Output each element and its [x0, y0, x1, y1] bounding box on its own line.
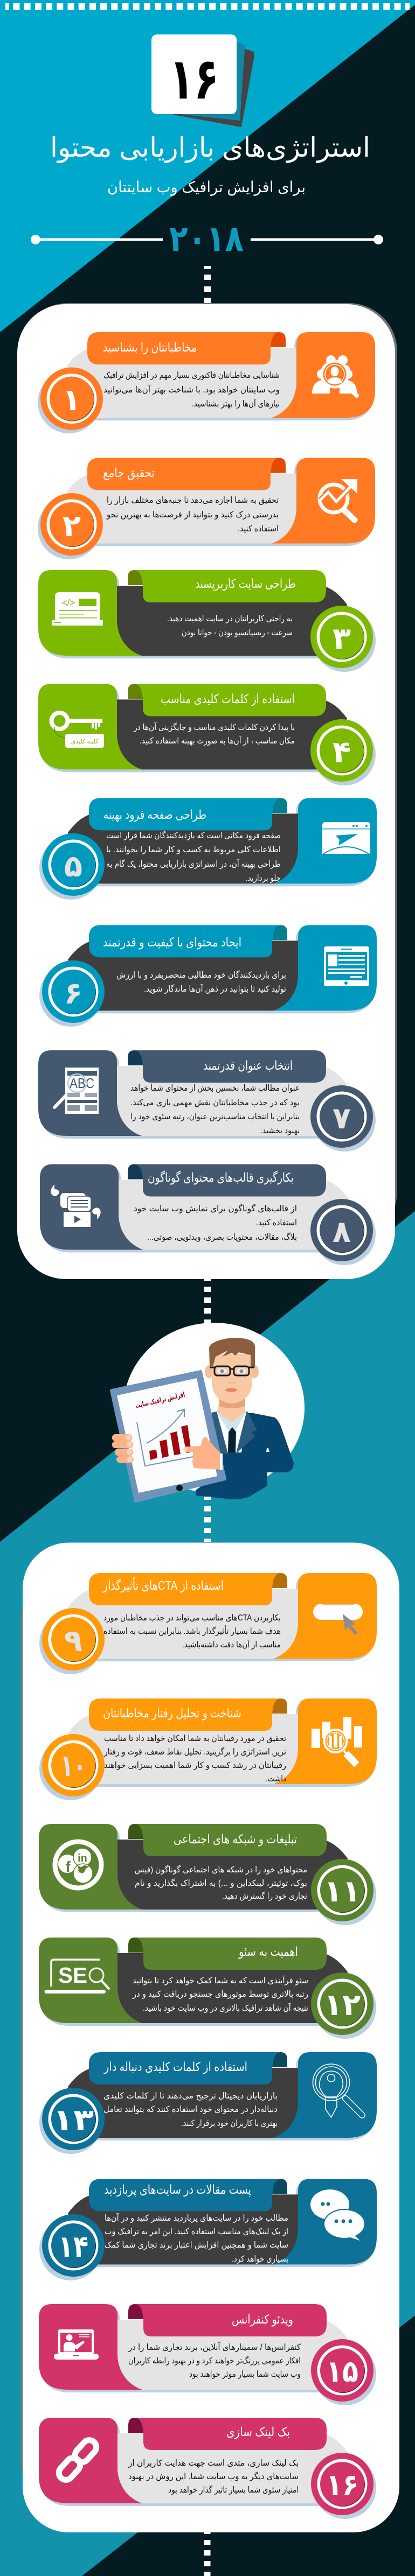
number badge 6 — [39, 960, 105, 1027]
card 1 text: نیازهای آن‌ها را بهتر بشناسید. — [192, 398, 280, 409]
number badge 14: ۱۴ — [58, 2229, 88, 2263]
card 9 text: مناسب از آن‌ها دقت داشته‌باشید. — [182, 1639, 281, 1650]
icon: growth magnifier — [320, 479, 357, 520]
illustration: man with tablet — [112, 1323, 305, 1501]
card 15 text — [128, 2342, 301, 2380]
number badge 12 — [311, 1973, 376, 2039]
card 16 text: بک لینک سازی، متدی است جهت هدایت کاربران از — [128, 2459, 299, 2468]
card 7 text — [130, 1084, 300, 1136]
card 1 — [38, 332, 375, 433]
number badge 4 — [310, 719, 376, 785]
card 12 title: اهمیت به سئو — [238, 1945, 298, 1959]
number badge 1 — [38, 367, 103, 433]
card 4 text: با پیدا کردن کلمات کلیدی مناسب و جایگزینی آن‌ها در — [133, 722, 295, 733]
card 7 text: بنابراین با انتخاب مناسب‌ترین عنوان، رتبه سئوی خود را — [130, 1112, 300, 1121]
card 11 text: بوک، توئیتر، لینکداین و ...) به اشتراک بگذارید و نام — [135, 1878, 307, 1889]
card 10 text — [103, 1734, 286, 1784]
card 10 text: رقیبانتان در رشد کسب و کار شما اهمیت بسزایی خواهند — [104, 1761, 286, 1771]
icon: audience search — [312, 355, 357, 396]
card 13 text: بهتری با کاربران خود برقرار کنند. — [181, 2119, 278, 2129]
card 8 shape — [40, 1164, 349, 1252]
card 1 text: شناسایی مخاطبانتان فاکتوری بسیار مهم در افزایش ترافیک — [103, 371, 280, 381]
top dashed strip — [5, 3, 410, 10]
icon: chain link — [56, 2437, 99, 2483]
number badge 7: ۷ — [333, 1101, 351, 1135]
tablet: افزایش ترافیک سایت — [135, 1391, 186, 1409]
card 4 text — [133, 722, 295, 746]
man figure — [196, 1338, 294, 1499]
card 13 text: دنباله‌دار در محتوای خود استفاده کنند که بتوانند تعامل — [103, 2105, 278, 2114]
number badge 4: ۴ — [333, 735, 351, 769]
card 5 text: صفحه فرود مکانی است که بازدیدکنندگان شما قرار است — [106, 831, 281, 841]
card 6 text: تولید کنید تا بتوانید در ذهن آن‌ها ماندگار شوید. — [144, 984, 286, 994]
icon: video conference laptop — [54, 2329, 99, 2360]
card 12 text: نتیجه آن شاهد ترافیک بالاتری در وب سایت خود باشید. — [143, 2003, 308, 2013]
card 2 text: بدرستی درک کنید و بتوانید از فرصت‌ها به بهترین نحو — [106, 510, 279, 520]
card 4 text: مکان مناسب ، از آن‌ها به صورت بهینه استفاده کنید. — [140, 735, 295, 746]
card 8 — [40, 1164, 376, 1265]
card 13 text: بازاریابان دیجیتال ترجیح می‌دهند تا از کلمات کلیدی — [103, 2091, 278, 2101]
card 8 text: استفاده کنید. — [256, 1218, 297, 1227]
card 16 text — [128, 2459, 299, 2495]
card 2 text — [106, 496, 279, 534]
card 5 text: طراحی بهینه آن، در استراتژی بازاریابی محتوا، یک گام به — [106, 859, 281, 869]
card 7 shape — [38, 1050, 347, 1139]
icon: SEO laptop: SE — [58, 1963, 87, 1988]
icon: social networks: f — [65, 1858, 71, 1875]
card 12 — [39, 1938, 376, 2039]
card 2 text: استفاده کنید. — [238, 524, 279, 534]
card 14 text: از بک لینک‌های مناسب استفاده کنید. این امر به ترافیک وب — [105, 2227, 288, 2237]
header number card — [151, 34, 254, 127]
card 5 text: جلو بردارید. — [246, 874, 281, 883]
connector dashes bottom — [204, 2532, 210, 2576]
number badge 13: ۱۳ — [53, 2103, 94, 2137]
card 8 text: از قالب‌های گوناگون برای نمایش وب سایت خود — [134, 1204, 297, 1214]
card 13 — [39, 2052, 377, 2154]
number badge 8: ۸ — [333, 1215, 351, 1248]
card 11 — [39, 1824, 376, 1925]
card 14 text — [105, 2213, 288, 2264]
number badge 2 — [38, 493, 103, 559]
card 11 text: محتواهای خود را در شبکه های اجتماعی گوناگون (فیس — [135, 1865, 307, 1875]
icon: newspaper headline — [54, 1068, 99, 1114]
card 16 title: بک لینک سازی — [226, 2425, 290, 2439]
card 5 text: اطلاعات کلی مربوط به کسب و کار شما را بخوانند. با — [106, 845, 281, 855]
card 7 text: بهبود بخشید. — [260, 1126, 300, 1136]
number badge 1: ۱ — [63, 383, 81, 417]
card 9 text: بکاربردن CTAهای مناسب می‌تواند در جذب مخاطبان مورد — [103, 1613, 281, 1623]
card 16 text: امتیاز سئوی شما بسیار تاثیر گذار خواهد بود — [168, 2485, 299, 2495]
card 15 title: ویدئو کنفرانس — [232, 2312, 293, 2327]
number badge 5: ۵ — [64, 849, 82, 883]
card 7 text: عنوان مطالب شما، نخستین بخش از محتوای شما خواهد — [130, 1084, 300, 1093]
number badge 10 — [39, 1734, 105, 1800]
card 9 — [39, 1573, 377, 1674]
card 5 — [39, 798, 377, 900]
card 7 text: بود که در جذب مخاطبانتان نقش مهمی بازی می‌کند. — [130, 1098, 300, 1108]
card 1 text — [103, 371, 280, 409]
connector dashes top — [204, 266, 211, 303]
icon: social networks: in — [78, 1852, 87, 1864]
card 10 shape — [68, 1698, 377, 1787]
card 6 title: ایجاد محتوای با کیفیت و قدرتمند — [103, 935, 241, 950]
hands — [112, 1434, 223, 1470]
number badge 10: ۱۰ — [60, 1749, 86, 1782]
card 14 title: پست مقالات در سایت‌های پربازدید — [104, 2182, 251, 2197]
card 12 shape — [39, 1938, 348, 2026]
title: استراتژی‌های بازاریابی محتوا — [50, 132, 370, 163]
card 5 text — [106, 831, 281, 883]
card 8 text — [134, 1204, 297, 1243]
card 14 shape — [68, 2179, 377, 2267]
card 10 — [39, 1698, 377, 1800]
icon: chat bubbles — [310, 2189, 365, 2241]
number badge 11 — [311, 1859, 376, 1925]
year divider: ۲۰۱۸ — [169, 219, 244, 258]
icon: content formats — [51, 1184, 101, 1227]
card 14 text: مطالب خود را در سایت‌های پربازدید منتشر کنید و در آن‌ها — [105, 2213, 288, 2223]
card 16 shape — [39, 2418, 348, 2506]
icon: newspaper headline: ABC — [70, 1075, 94, 1091]
card 2 — [38, 458, 375, 559]
card 7 title: انتخاب عنوان قدرتمند — [203, 1058, 293, 1073]
card 9 text — [103, 1613, 281, 1650]
connector dashes middle — [204, 1279, 211, 1323]
icon: laptop code — [52, 592, 103, 626]
card 14 — [39, 2179, 377, 2280]
number badge 14 — [39, 2214, 105, 2280]
card 14 text: بسیاری خواهد کرد. — [232, 2255, 288, 2264]
number badge 12: ۱۲ — [324, 1988, 361, 2022]
icon: tablet article — [324, 946, 369, 986]
card 3 text — [167, 614, 293, 638]
card 5 title: طراحی صفحه فرود بهینه — [103, 808, 206, 822]
card 11 text: تجاری خود را گسترش دهید. — [222, 1891, 307, 1901]
card 3 text: به راحتی کاربرانتان در سایت اهمیت دهید. — [167, 614, 293, 623]
number badge 7 — [310, 1085, 376, 1152]
card 9 shape — [68, 1573, 377, 1661]
card 6 text — [116, 970, 286, 994]
number badge 15: ۱۵ — [326, 2354, 358, 2388]
card 15 — [39, 2304, 376, 2405]
panel: second white panel — [21, 1543, 399, 2532]
card 10 text: ترین استراتژی را برگزینید. تحلیل نقاط ضعف، قوت و رفتار — [103, 1747, 286, 1757]
card 11 title: تبلیغات و شبکه های اجتماعی — [174, 1832, 297, 1847]
card 11 shape — [39, 1824, 348, 1912]
number badge 5 — [39, 833, 105, 900]
header number card: ۱۶ — [169, 47, 219, 111]
card 15 text: افکار عمومی پررنگ‌تر خواهند کرد و در بهبود رابطه کاربران — [128, 2356, 301, 2366]
card 8 text: بلاگ، مقالات، محتویات بصری، ویدئویی، صوتی... — [147, 1232, 297, 1243]
card 11 text — [135, 1865, 307, 1901]
card 16 — [39, 2418, 376, 2519]
number badge 2: ۲ — [63, 509, 81, 543]
number badge 13 — [39, 2088, 105, 2154]
card 15 shape — [39, 2304, 348, 2392]
card 3 title: طراحی سایت کاربرپسند — [195, 577, 296, 591]
card 15 text: کنفرانس‌ها / سمینارهای آنلاین، برند تجاری شما را در — [128, 2342, 301, 2352]
icon: keyword key — [52, 713, 104, 748]
card 10 text: تحقیق در مورد رقیبانتان به شما امکان خواهد داد تا مناسب — [104, 1734, 286, 1743]
card 4 — [38, 684, 376, 785]
card 8 title: بکارگیری قالب‌های محتوای گوناگون — [148, 1170, 294, 1185]
number badge 3 — [310, 606, 376, 672]
card 3 text: سرعت - ریسپانسیو بودن - خوانا بودن — [182, 628, 293, 638]
icon: call to action button — [313, 1604, 363, 1635]
number badge 9 — [39, 1608, 105, 1674]
tablet — [112, 1372, 225, 1501]
card 7 — [38, 1050, 376, 1152]
subtitle: برای افزایش ترافیک وب سایتتان — [107, 179, 306, 196]
card 3 shape — [38, 570, 347, 658]
card 13 title: استفاده از کلمات کلیدی دنباله دار — [103, 2060, 247, 2074]
card 5 shape — [68, 798, 377, 886]
card 15 text: وب سایت شما بسیار موثر خواهند بود — [189, 2370, 301, 2380]
card 12 text: رتبه بالاتری توسط موتورهای جستجو دریافت کنید و در — [132, 1990, 308, 1999]
panel: first white panel — [17, 303, 397, 1279]
card 12 text: سئو فرآیندی است که به شما کمک خواهد کرد تا بتوانید — [133, 1975, 308, 1985]
year divider — [31, 219, 383, 258]
icon: long-tail key magnifier — [313, 2064, 362, 2117]
card 13 shape — [68, 2052, 377, 2140]
card 1 text: وب سایتتان خواهد بود. با شناخت بهتر آن‌ها می‌توانید — [103, 384, 280, 395]
card 9 title: استفاده از CTAهای تأثیرگذار — [102, 1577, 224, 1593]
card 4 title: استفاده از کلمات کلیدی مناسب — [161, 692, 295, 706]
number badge 9: ۹ — [64, 1624, 82, 1658]
card 14 text: سایت شما و همچنین افزایش اعتبار برند تجاری شما کمک — [105, 2241, 288, 2250]
card 10 text: داشت. — [266, 1774, 286, 1784]
card 2 text: تحقیق به شما اجازه می‌دهد تا جنبه‌های مختلف بازار را — [107, 496, 279, 505]
number badge 16 — [311, 2453, 376, 2519]
connector dashes lower — [204, 1497, 211, 1542]
card 2 title: تحقیق جامع — [103, 466, 155, 480]
card 10 title: شناخت و تحلیل رفتار مخاطبانتان — [103, 1706, 241, 1721]
card 4 shape — [38, 684, 347, 772]
card 9 text: هدف شما بسیار تأثیرگذار باشد. بنابراین نسبت به استفاده — [103, 1625, 281, 1636]
card 6 text: برای بازدیدکنندگان خود مطالبی منحصربفرد و با ارزش — [116, 970, 286, 980]
card 6 — [39, 925, 377, 1027]
number badge 11: ۱۱ — [324, 1874, 361, 1908]
number badge 16: ۱۶ — [326, 2468, 358, 2502]
card 2 shape — [66, 458, 375, 546]
card 13 text — [103, 2091, 278, 2129]
number badge 6: ۶ — [64, 976, 82, 1010]
icon: keyword key: کلمه کلیدی — [71, 739, 99, 745]
white circle backdrop — [123, 1323, 305, 1493]
card 1 shape — [66, 332, 375, 420]
card 6 shape — [68, 925, 377, 1013]
number badge 8 — [310, 1199, 376, 1265]
card 3 — [38, 570, 376, 672]
icon: analysis magnifier — [312, 1717, 362, 1765]
icon: laptop code: </> — [62, 598, 75, 608]
card 1 title: مخاطبانتان را بشناسید — [103, 340, 197, 355]
number badge 15 — [311, 2339, 376, 2405]
number badge 3: ۳ — [333, 621, 351, 655]
icon: SEO laptop — [44, 1960, 109, 1994]
icon: social networks — [55, 1842, 101, 1888]
card 16 text: سایت‌های دیگر به وب سایت شما. این روش در بهبود — [128, 2472, 299, 2482]
card 12 text — [132, 1975, 308, 2013]
icon: browser with paper plane — [322, 822, 370, 854]
